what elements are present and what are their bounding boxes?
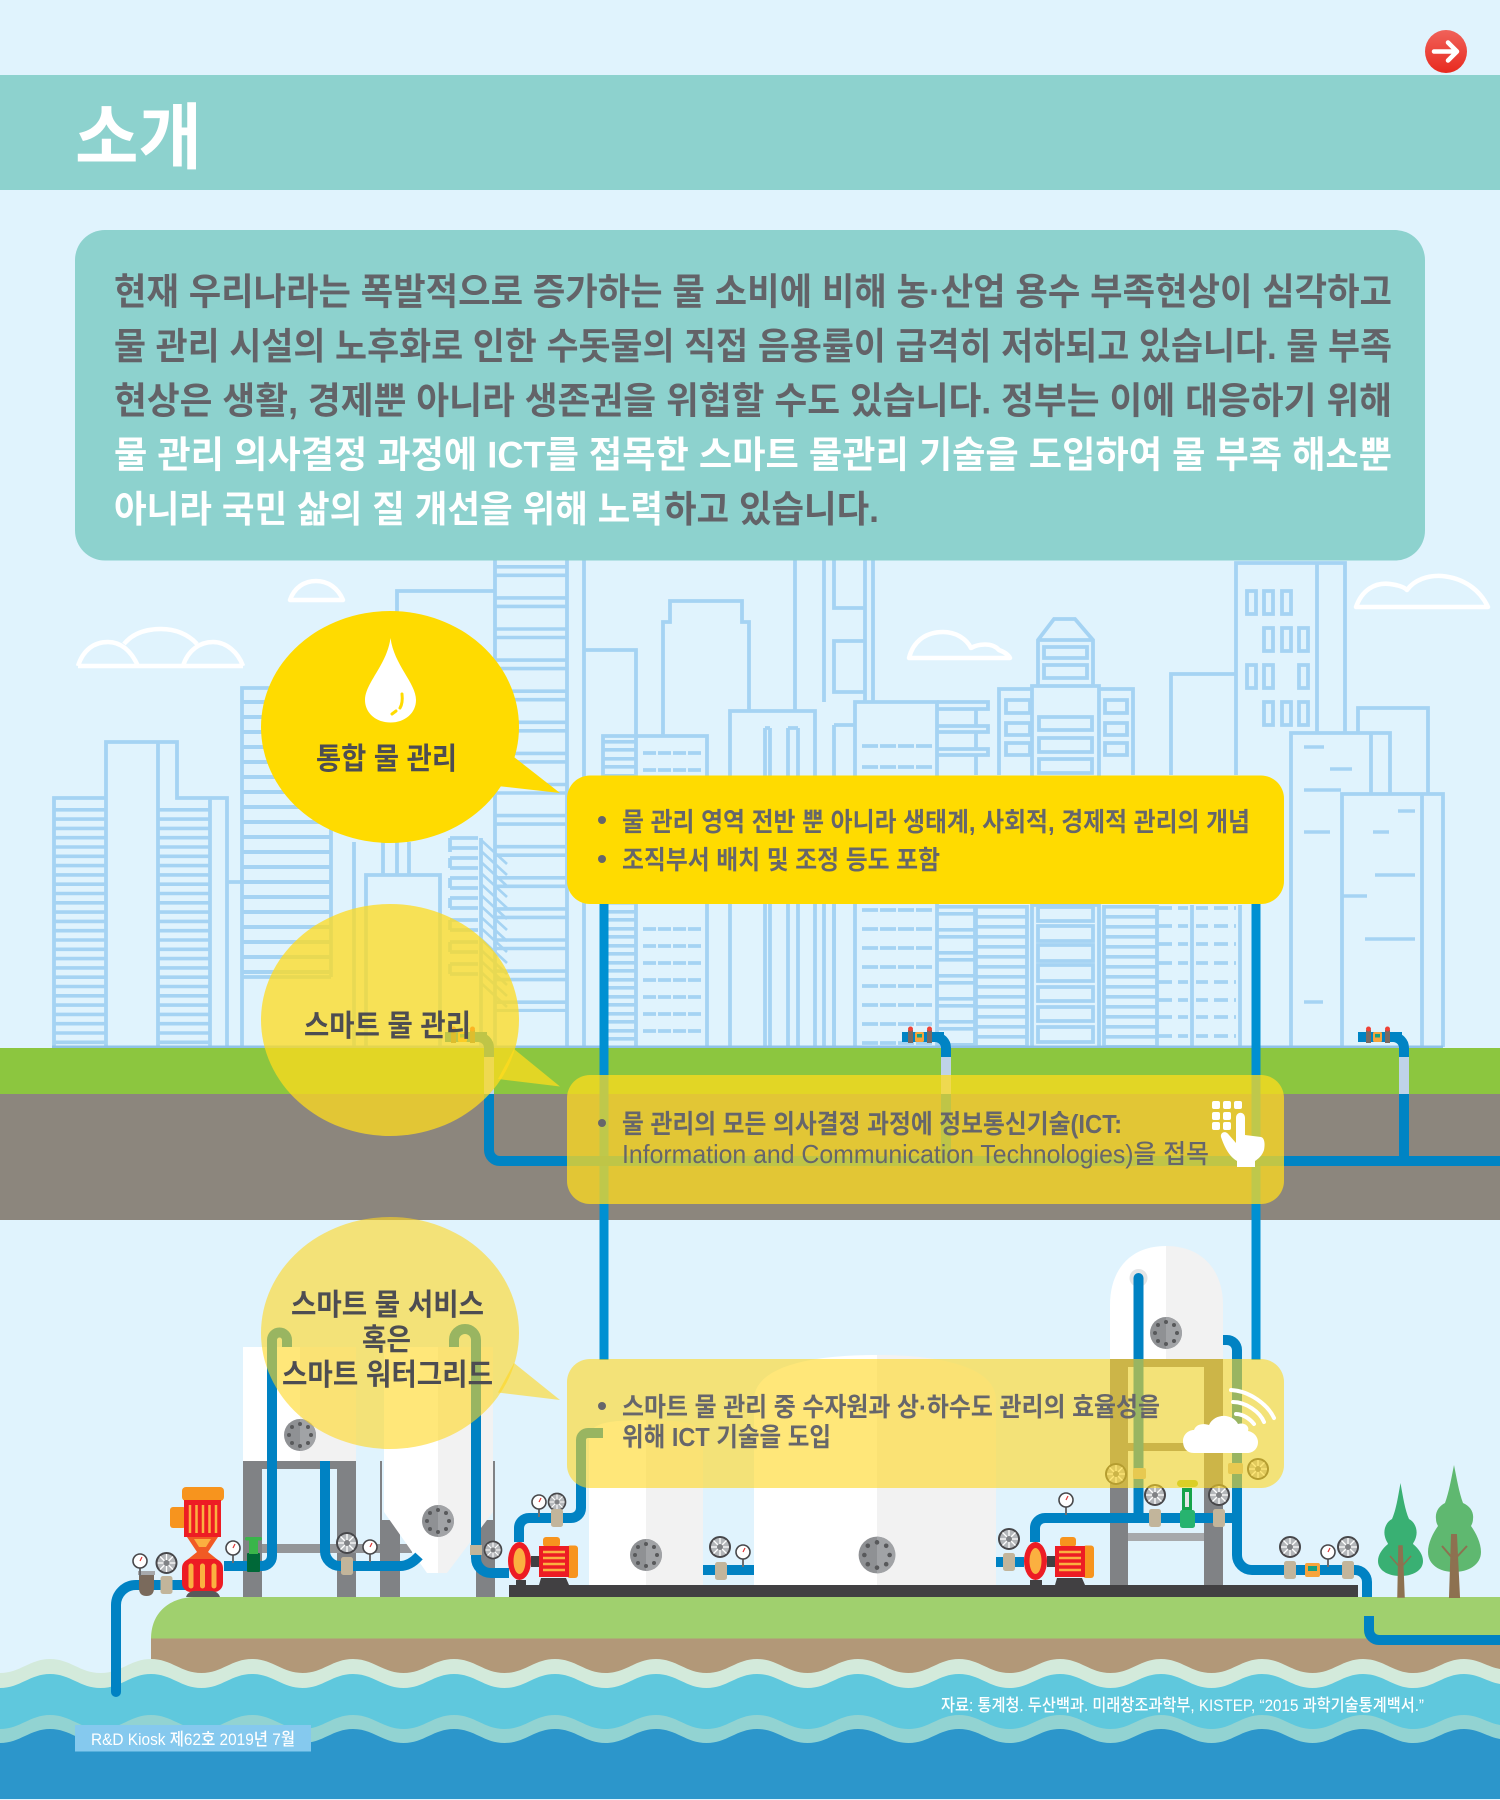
panel: introduction text — [75, 230, 1425, 560]
treatment plant illustration — [116, 1246, 1367, 1692]
panel: integrated water management details: 물 관리 영역 전반 뿐 아니라 생태계, 사회적, 경제적 관리의 개념 — [622, 807, 1250, 837]
pump left — [170, 1487, 224, 1597]
panel: introduction text: 아니라 국민 삶의 질 개선을 위해 노력 — [114, 489, 663, 530]
icon: trees — [1378, 1465, 1481, 1597]
panel: introduction text: 물 관리 시설의 노후화로 인한 수돗물의 직접 음용률이 급격히 저하되고 있습니다. 물 부족 — [114, 326, 1392, 367]
building group right — [1236, 563, 1443, 1047]
panel: smart water management details: Information and Communication Technologies)을 접목 — [622, 1139, 1209, 1169]
panel: smart water management details: 물 관리의 모든 의사결정 과정에 정보통신기술(ICT: — [622, 1109, 1122, 1139]
panel: introduction text: 물 관리 의사결정 과정에 ICT를 접목한 스마트 물관리 기술을 도입하여 물 부족 해소뿐 — [114, 434, 1392, 476]
title: 소개 — [75, 99, 202, 179]
source note: 자료: 통계청. 두산백과. 미래창조과학부, KISTEP, “2015 과학기술통계백서.” — [941, 1696, 1424, 1715]
callout: integrated water management — [261, 611, 560, 843]
valves and gauges left — [133, 1493, 1073, 1596]
panel: smart water management details — [567, 1075, 1284, 1204]
building group left — [54, 560, 636, 1047]
panel: introduction text: 현상은 생활, 경제뿐 아니라 생존권을 위협할 수도 있습니다. 정부는 이에 대응하기 위해 — [114, 380, 1392, 422]
panel: integrated water management details: 조직부서 배치 및 조정 등도 포함 — [622, 845, 940, 875]
process pipes — [116, 1278, 1367, 1692]
cityscape illustration — [52, 560, 1488, 1047]
footer issue label — [75, 1725, 311, 1752]
water waves — [0, 1659, 1500, 1800]
footer issue label: R&D Kiosk 제62호 2019년 7월 — [91, 1730, 295, 1749]
clouds — [78, 576, 1488, 666]
panel: integrated water management details — [567, 776, 1284, 904]
panel: smart water service details: 스마트 물 관리 중 수자원과 상·하수도 관리의 효율성을 — [622, 1392, 1160, 1422]
tank structures — [243, 1246, 1358, 1597]
valves and gauges right — [1106, 1459, 1358, 1579]
ground bands — [0, 1048, 1500, 1220]
island ground — [151, 1597, 1500, 1688]
icon: touch keypad hand — [1212, 1101, 1265, 1167]
callout: integrated water management: 통합 물 관리 — [316, 743, 457, 776]
callout: smart water service / smart water grid — [261, 1217, 560, 1449]
callout: smart water service / smart water grid: 스마트 워터그리드 — [282, 1359, 493, 1392]
panel: smart water service details: 위해 ICT 기술을 도입 — [622, 1422, 831, 1452]
icon: water drop — [365, 638, 416, 722]
panel: smart water service details — [567, 1359, 1284, 1488]
building group tower — [975, 619, 1240, 1047]
callout: smart water service / smart water grid: 혹은 — [362, 1324, 411, 1357]
building group center — [603, 560, 988, 1047]
icon: pipe valve meters — [445, 1026, 1402, 1043]
callout: smart water service / smart water grid: 스마트 물 서비스 — [291, 1289, 484, 1322]
underground water pipes — [445, 904, 1500, 1360]
panel: introduction text: 현재 우리나라는 폭발적으로 증가하는 물 소비에 비해 농·산업 용수 부족현상이 심각하고 — [114, 272, 1392, 312]
callout: smart water management: 스마트 물 관리 — [304, 1010, 471, 1043]
pump right — [1024, 1537, 1094, 1585]
pipe stub in water — [111, 1660, 121, 1692]
icon: next arrow button — [1425, 30, 1467, 73]
callout: smart water management — [261, 904, 560, 1136]
panel: introduction text: 하고 있습니다. — [664, 489, 879, 530]
icon: wifi cloud — [1183, 1390, 1274, 1453]
pump middle — [508, 1537, 578, 1585]
title band — [0, 75, 1500, 190]
